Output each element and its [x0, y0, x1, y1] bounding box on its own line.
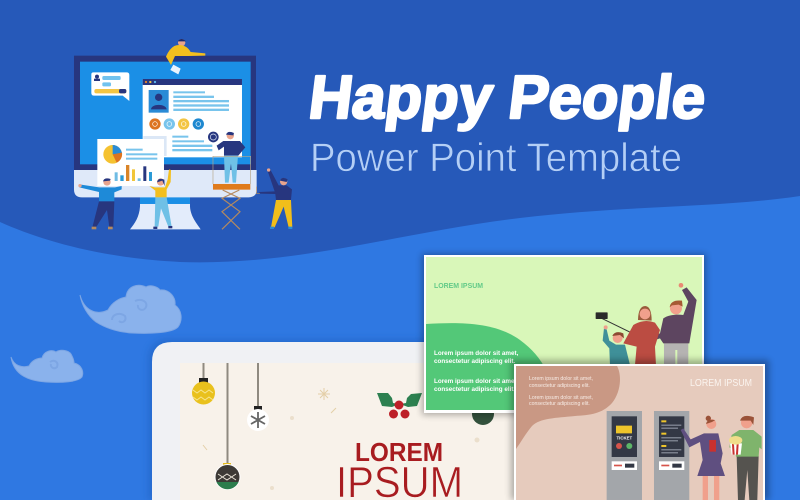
- green ornament behind card: [472, 403, 494, 425]
- green blob: [426, 323, 546, 410]
- peach card background: [516, 366, 763, 500]
- stand shadow: [140, 197, 190, 204]
- subtitle: Power Point Template: [310, 136, 682, 180]
- monitor screen: [80, 62, 251, 164]
- peach card frame: [514, 364, 765, 500]
- woman: [681, 416, 725, 500]
- green card text: consectetur adipiscing elit.: [434, 358, 515, 365]
- tablet shadow: [148, 339, 488, 500]
- monitor frame: [74, 56, 256, 171]
- green card text: [434, 350, 519, 393]
- peach card text: consectetur adipiscing elit.: [529, 383, 590, 389]
- tablet slide: christmas: [148, 339, 552, 500]
- green card text: Lorem ipsum dolor sit amet,: [434, 350, 519, 357]
- green card heading: LOREM IPSUM: [434, 283, 483, 290]
- phone: [596, 312, 608, 319]
- person in yellow shirt: [149, 169, 172, 229]
- peach card text: Lorem ipsum dolor sit amet,: [529, 376, 593, 382]
- person in blue shirt: [78, 178, 122, 229]
- profile window: [143, 79, 242, 157]
- large cloud: [80, 285, 181, 333]
- monitor illustration: [74, 39, 292, 229]
- peach card text: consectetur adipiscing elit.: [529, 401, 590, 407]
- peach card heading: LOREM IPSUM: [690, 377, 752, 389]
- tablet frame: [152, 342, 552, 500]
- peach card text: [529, 376, 593, 407]
- green slide card: [422, 254, 706, 415]
- peach slide card: [511, 360, 769, 500]
- kiosk: menu: [654, 411, 689, 500]
- peach card shadow: [511, 360, 769, 500]
- slide background: [180, 363, 520, 500]
- small cloud: [11, 350, 83, 382]
- selfie stick: [602, 318, 643, 338]
- chat bubble: [91, 72, 129, 101]
- ornament strings: [204, 363, 258, 465]
- green card background: [426, 257, 702, 410]
- green ornament: [214, 463, 240, 490]
- gold snowflake: [318, 388, 330, 400]
- monitor stand: [130, 197, 201, 229]
- faint confetti dots: [203, 408, 480, 490]
- lower wave background: [0, 196, 800, 500]
- person pointing at monitor: [257, 168, 292, 229]
- green card text: Lorem ipsum dolor sit amet,: [434, 378, 519, 385]
- monitor chin: [74, 170, 257, 197]
- green card text: consectetur adipiscing elit.: [434, 386, 515, 393]
- kiosk: ticket: TICKET: [617, 435, 632, 440]
- family selfie illustration: [596, 283, 697, 365]
- person on lift: [208, 132, 251, 229]
- holly: [377, 393, 422, 418]
- child: [603, 325, 630, 365]
- peach blob: [516, 366, 620, 449]
- mother: [623, 306, 660, 365]
- person on top of monitor: [166, 39, 205, 74]
- slide heading: LOREM: [355, 437, 443, 467]
- peach card text: Lorem ipsum dolor sit amet,: [529, 395, 593, 401]
- title: Happy People: [305, 63, 710, 131]
- chart panel: [97, 139, 164, 186]
- ticket kiosks and couple illustration: [607, 411, 762, 500]
- white snowflake ornament: [247, 406, 269, 431]
- green card frame: [424, 255, 704, 413]
- green card shadow: [422, 254, 706, 415]
- father: [642, 283, 697, 365]
- kiosk: ticket: [607, 411, 642, 500]
- yellow ornament: [192, 378, 215, 404]
- man: [729, 416, 762, 500]
